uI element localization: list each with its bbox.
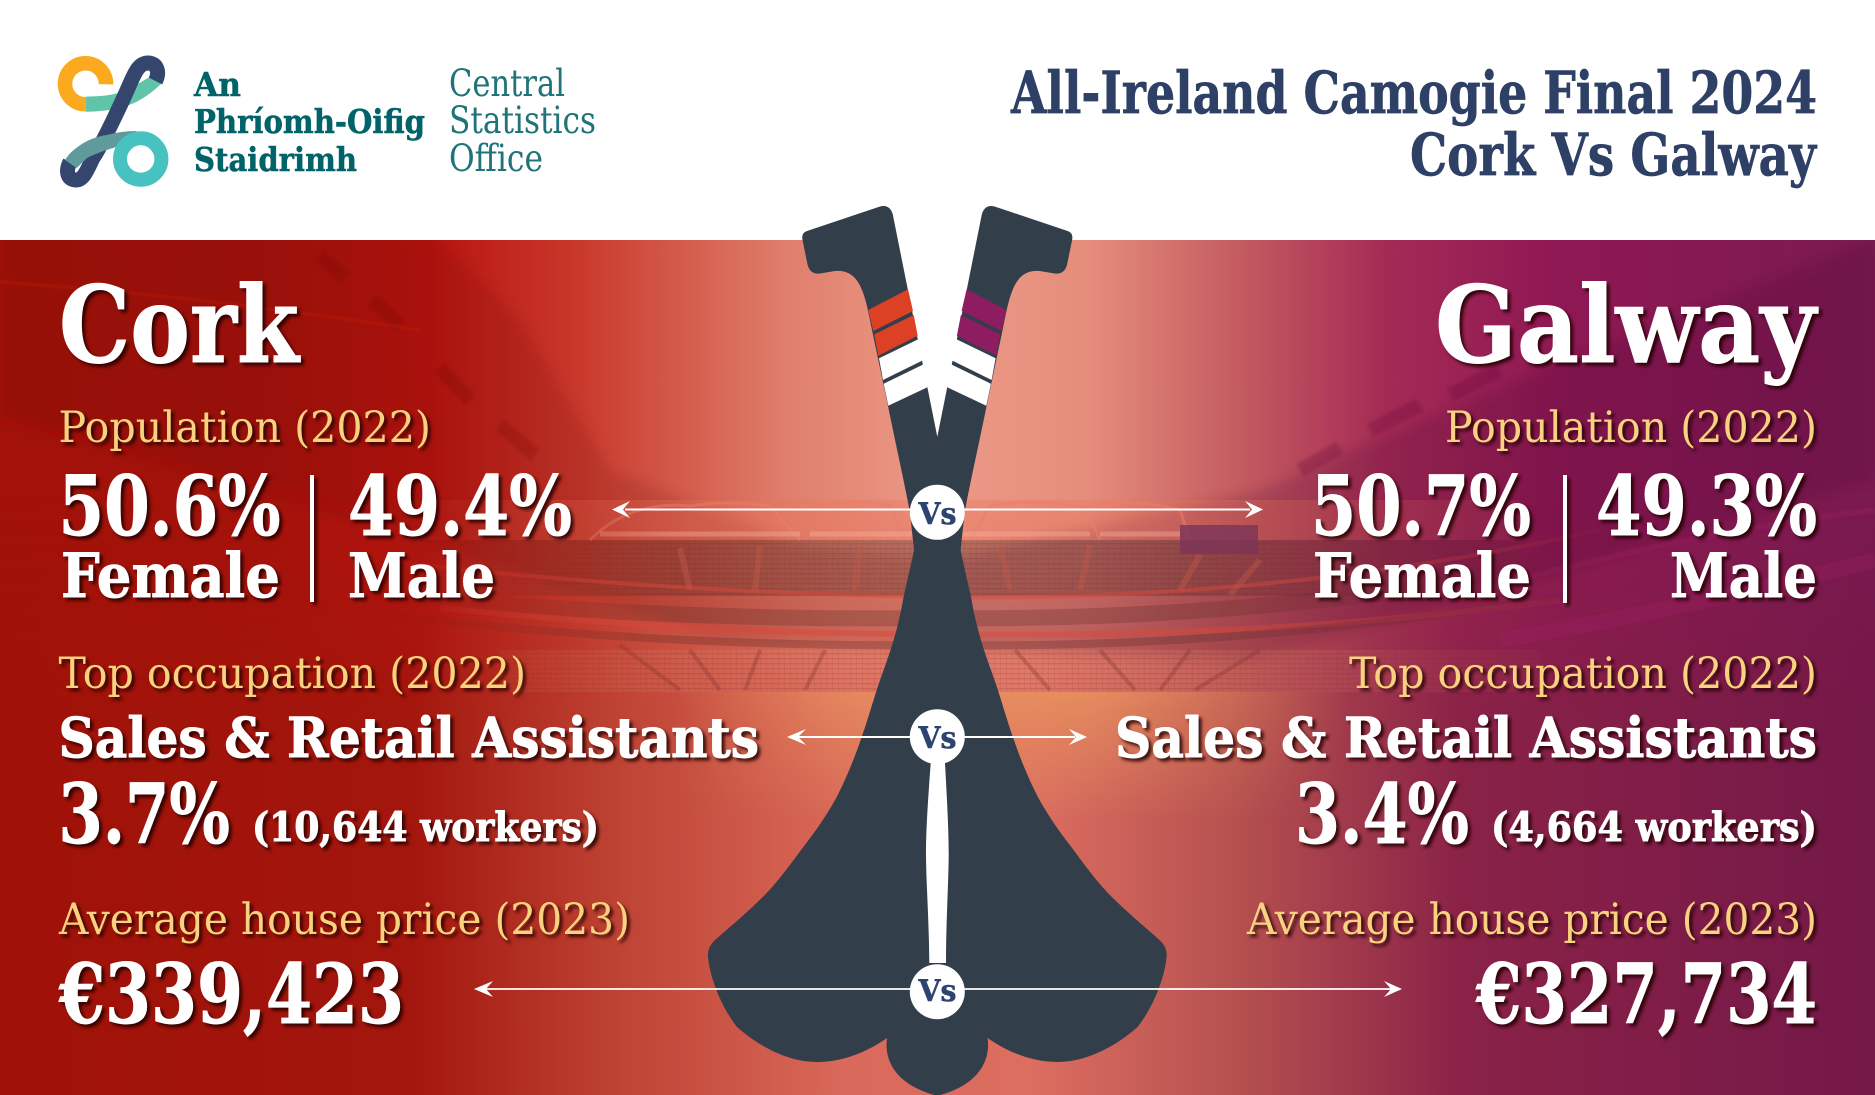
Vs badge: house price bbox=[910, 964, 965, 1019]
Galway maroon grip bands bbox=[957, 289, 1006, 356]
logo text: English name: Office bbox=[449, 137, 543, 180]
white V between handles bbox=[892, 212, 983, 437]
stat: female percentage: 50.6% bbox=[58, 459, 280, 555]
arrow: house price bbox=[474, 981, 1402, 997]
stat: male percentage: 49.4% bbox=[348, 459, 572, 555]
stat: workers: (4,664 workers) bbox=[1491, 804, 1817, 851]
stat: female percentage: 50.7% bbox=[1311, 459, 1531, 555]
stat: female label: Female bbox=[61, 541, 280, 612]
right hurley half bbox=[937, 206, 1167, 1095]
logo: grey-teal band bbox=[65, 131, 137, 168]
label: top occupation: Top occupation (2022) bbox=[58, 649, 526, 699]
sunlit pitch bbox=[708, 692, 1320, 794]
logo text: English name: Statistics bbox=[449, 99, 596, 142]
stat: occupation percentage: 3.7% bbox=[58, 767, 230, 863]
stat: occupation name: Sales & Retail Assistants bbox=[1115, 705, 1817, 770]
stat: workers: (10,644 workers) bbox=[252, 804, 599, 851]
logo text: Irish name bbox=[193, 65, 425, 179]
arrow: occupation bbox=[787, 729, 1087, 745]
Cork red grip bands bbox=[868, 289, 918, 356]
white header background bbox=[0, 0, 1875, 240]
label: house price: Average house price (2023) bbox=[1246, 895, 1817, 945]
stat: occupation percentage: 3.4% bbox=[1295, 767, 1469, 863]
stat: male label: Male bbox=[1670, 541, 1817, 612]
logo: green band bbox=[86, 77, 162, 112]
panel: Cork bbox=[58, 262, 759, 1043]
divider bbox=[1563, 475, 1567, 603]
logo text: Irish name: Staidrimh bbox=[194, 140, 357, 179]
Vs badge: population bbox=[910, 485, 965, 540]
Vs badge: occupation: Vs bbox=[918, 721, 956, 756]
Cork white grip bands bbox=[879, 339, 928, 406]
stadium central stands bbox=[424, 500, 1561, 692]
label: top occupation: Top occupation (2022) bbox=[1349, 649, 1817, 699]
logo bbox=[65, 63, 162, 180]
panel: Galway bbox=[1115, 262, 1819, 1043]
stadium stand structure, right bbox=[940, 240, 1875, 660]
Vs badge: house price: Vs bbox=[918, 974, 956, 1009]
heading: Galway: Galway bbox=[1435, 262, 1819, 387]
stat: house price: €339,423 bbox=[58, 947, 404, 1043]
hurley crossing graphic bbox=[708, 206, 1167, 1095]
label: house price: Average house price (2023) bbox=[58, 895, 630, 945]
stat: female label: Female bbox=[1313, 541, 1531, 612]
arrow: population bbox=[612, 501, 1263, 518]
logo text: Irish name: Phríomh-Oifig bbox=[194, 102, 425, 141]
title bbox=[1010, 59, 1818, 189]
logo text: English name: Central bbox=[449, 62, 565, 105]
logo: navy strand bbox=[68, 63, 158, 180]
Vs badge: occupation bbox=[910, 709, 965, 764]
white slit on the hurley head bbox=[926, 763, 949, 963]
stadium stand structure, left bbox=[0, 230, 940, 650]
background: stadium gradient panel bbox=[0, 230, 1875, 1095]
logo: orange loop bbox=[65, 63, 106, 104]
left hurley half bbox=[708, 206, 938, 1095]
stadium roof streaks, sides bbox=[0, 256, 1875, 640]
stat: male percentage: 49.3% bbox=[1596, 459, 1817, 555]
logo text: Irish name: An bbox=[193, 65, 241, 104]
stat: occupation name: Sales & Retail Assistants bbox=[58, 705, 759, 770]
logo: teal ring bbox=[120, 138, 161, 180]
label: population: Population (2022) bbox=[58, 403, 431, 453]
label: population: Population (2022) bbox=[1445, 403, 1817, 453]
logo text: English name bbox=[449, 62, 596, 180]
heading: Cork: Cork bbox=[59, 262, 301, 387]
stat: male label: Male bbox=[348, 541, 495, 612]
divider bbox=[310, 475, 314, 602]
big screen bbox=[1180, 525, 1258, 554]
Galway white grip bands bbox=[946, 339, 996, 406]
Vs badge: population: Vs bbox=[918, 497, 956, 532]
